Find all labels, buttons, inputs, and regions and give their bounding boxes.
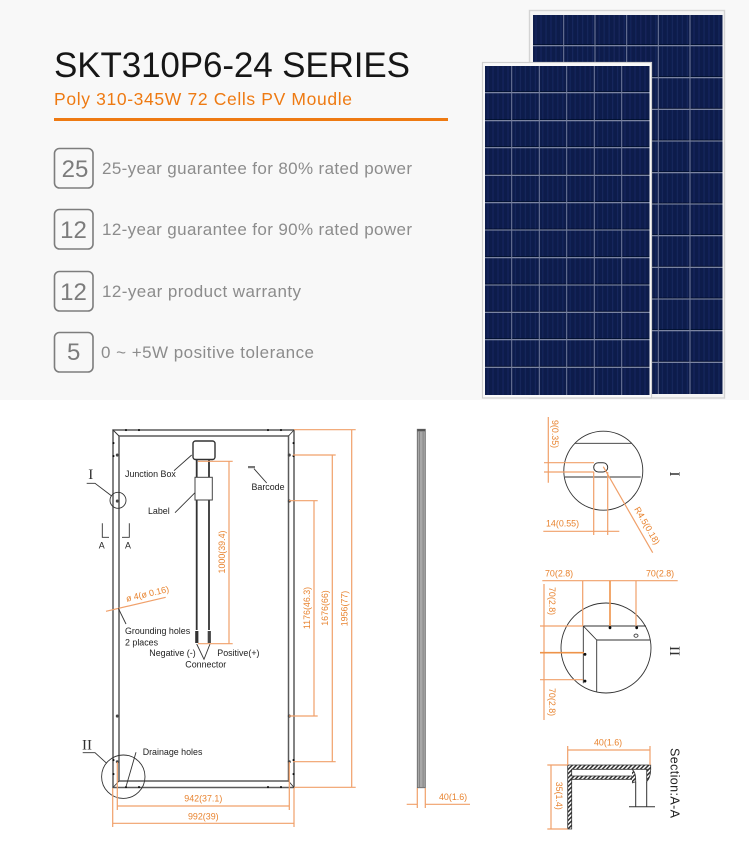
feature: 12-year warranty: 12-year product warranty [102, 282, 302, 301]
dimension: 1956: 1956(77) [340, 591, 350, 626]
dimension: 942 [117, 762, 289, 810]
label: drainage holes: Drainage holes [143, 747, 203, 757]
label: connector: Negative (-) [149, 648, 196, 658]
label: label [148, 493, 195, 516]
section A-A: frame profile: 35(1.4) [554, 782, 564, 810]
label: barcode [248, 466, 285, 492]
label: junction box [125, 455, 192, 479]
section marks A-A: A [125, 540, 131, 550]
module frame [113, 430, 294, 788]
feature: 12-year warranty: 12 [60, 279, 87, 306]
hole diameter dimension [106, 584, 170, 611]
label: barcode: Barcode [252, 482, 285, 492]
detail II: frame corner: 70(2.8) [547, 587, 557, 615]
orange rule [54, 118, 448, 121]
feature: 12-year guarantee: 12-year guarantee for 90% rated power [102, 220, 412, 239]
dimension: 942: 942(37.1) [184, 794, 222, 804]
detail II: frame corner: II [666, 646, 682, 656]
feature list [54, 148, 412, 372]
label: connector [149, 644, 260, 669]
label: label: Label [148, 506, 170, 516]
detail II: frame corner: 70(2.8) [545, 569, 573, 579]
dimension: 1176 [289, 501, 318, 716]
feature: 25-year guarantee [54, 148, 412, 188]
label: junction box: Junction Box [125, 469, 176, 479]
callout: detail II: II [82, 738, 92, 754]
label: drainage holes [126, 747, 203, 787]
section marks A-A [99, 523, 131, 550]
feature: 12-year guarantee [54, 210, 412, 249]
detail II: frame corner: 70(2.8) [646, 569, 674, 579]
feature: positive tolerance: 5 [67, 339, 80, 366]
hole diameter dimension: ø 4(ø 0.16) [125, 584, 170, 604]
feature: 12-year guarantee: 12 [60, 217, 87, 244]
feature: 25-year guarantee: 25 [62, 156, 88, 183]
feature: positive tolerance: 0 ~ +5W positive tolerance [101, 343, 314, 362]
detail II: frame corner [540, 569, 682, 720]
label: connector: Connector [185, 659, 226, 669]
solar panel: front [482, 62, 652, 398]
detail I: mounting hole: R4.5(0.18) [632, 505, 662, 546]
technical drawing: rear view of module [82, 430, 356, 827]
label: grounding holes: Grounding holes [125, 626, 191, 636]
section A-A: frame profile [547, 737, 682, 829]
section marks A-A: A [99, 540, 105, 550]
junction box and cables [193, 441, 215, 643]
dimension: 1956 [294, 430, 356, 787]
panel: header background [0, 0, 749, 400]
section A-A: frame profile: 40(1.6) [594, 737, 622, 747]
callout: detail I: I [88, 467, 93, 483]
detail I: mounting hole: I [666, 472, 682, 476]
dimension: 1000 [198, 461, 233, 644]
label: grounding holes: 2 places [125, 637, 159, 647]
feature: 25-year guarantee: 25-year guarantee for 80% rated power [102, 159, 412, 178]
dimension: 1000: 1000(39.4) [217, 530, 227, 573]
label: grounding holes [118, 608, 191, 647]
callout: detail II [82, 738, 145, 798]
section A-A: frame profile: Section:A-A [668, 748, 682, 819]
title: SKT310P6-24 SERIES [54, 46, 410, 85]
detail II: frame corner: 70(2.8) [547, 688, 557, 716]
solar panel: rear [530, 10, 724, 398]
detail I: mounting hole [543, 417, 682, 553]
dimension: 1176: 1176(46.3) [302, 587, 312, 629]
callout: detail I [87, 467, 126, 508]
label: connector: Positive(+) [217, 648, 260, 658]
dimension: 1676 [293, 455, 336, 762]
dimension: 1676: 1676(66) [320, 590, 330, 626]
feature: positive tolerance [54, 332, 314, 372]
dimension: 992: 992(39) [188, 811, 219, 821]
detail I: mounting hole: 14(0.55) [546, 519, 579, 529]
feature: 12-year warranty [54, 272, 302, 311]
technical drawing: side view of module: 40(1.6) [439, 792, 467, 802]
subtitle: Poly 310-345W 72 Cells PV Moudle [54, 89, 352, 109]
technical drawing: side view of module [407, 429, 470, 808]
dimension: 992 [113, 788, 294, 827]
detail I: mounting hole: 9(0.35) [550, 420, 560, 448]
